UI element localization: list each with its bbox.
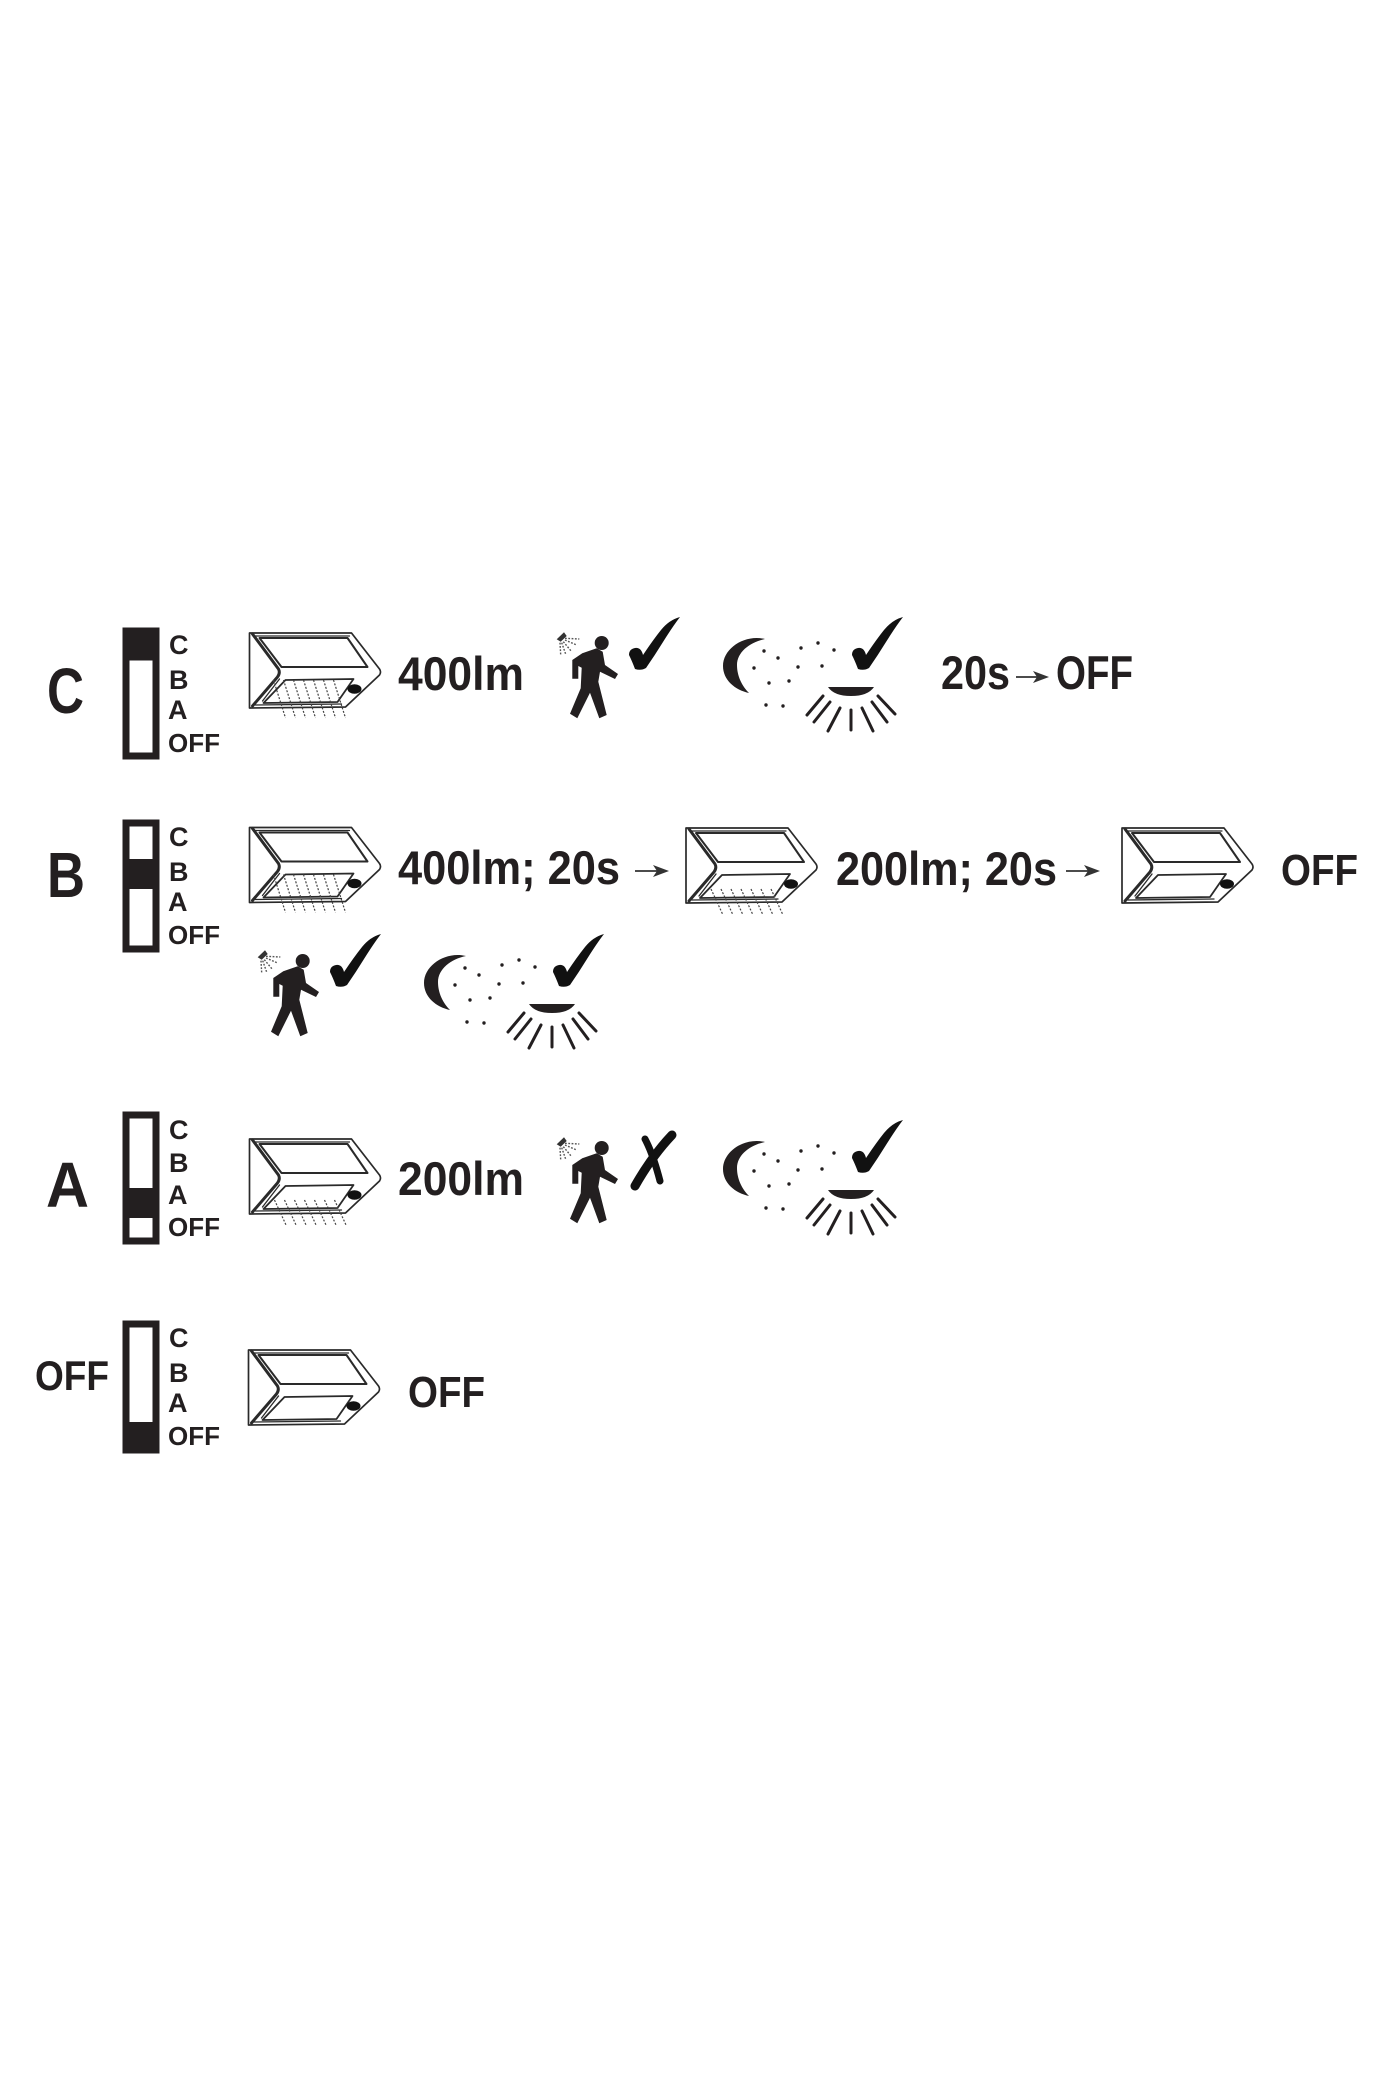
icon: lamp at 200lm — [250, 1139, 380, 1226]
text: 200lm: 200lm — [398, 1152, 524, 1205]
text: OFF: OFF — [408, 1368, 485, 1417]
switch: position B: C — [169, 822, 188, 852]
switch: position OFF: B — [169, 1358, 188, 1388]
panel: mode A — [46, 1115, 903, 1242]
switch: position OFF: C — [169, 1323, 188, 1353]
switch: position B: OFF — [168, 920, 220, 950]
switch: position A: A — [168, 1180, 188, 1210]
text: 400lm; 20s: 400lm; 20s — [398, 841, 620, 894]
panel: mode B — [47, 822, 1358, 1048]
switch: position A: C — [169, 1115, 188, 1145]
arrow — [1066, 865, 1100, 877]
icon: motion sensor person with cross — [557, 1135, 672, 1223]
switch: position C: A — [168, 695, 188, 725]
heading: A: A — [46, 1149, 89, 1221]
text: 20s to OFF: OFF — [1056, 646, 1133, 699]
switch: position C: B — [169, 665, 188, 695]
icon: lamp off — [1122, 828, 1253, 903]
switch: position A — [122, 1115, 220, 1242]
icon: lamp at 400lm — [250, 828, 380, 912]
icon: motion sensor person with check — [557, 617, 680, 718]
icon: night sensor with check — [723, 617, 903, 731]
icon: lamp with full light — [250, 633, 380, 718]
text: 400lm: 400lm — [398, 647, 524, 700]
icon: lamp at 200lm — [686, 828, 817, 915]
switch: position B: A — [168, 887, 188, 917]
text: 200lm; 20s: 200lm; 20s — [836, 842, 1057, 895]
switch: position OFF — [122, 1323, 220, 1453]
icon: night sensor with check — [424, 934, 604, 1048]
text: OFF: OFF — [1281, 846, 1358, 895]
panel: mode C — [47, 617, 1133, 758]
switch: position OFF: OFF — [168, 1421, 220, 1451]
switch: position C: OFF — [168, 728, 220, 758]
panel: mode OFF — [35, 1323, 485, 1453]
text: 20s to OFF: 20s — [941, 646, 1010, 699]
switch: position A: OFF — [168, 1212, 220, 1242]
switch: position C: C — [169, 630, 188, 660]
switch: position B — [122, 822, 220, 950]
heading: OFF: OFF — [35, 1352, 109, 1399]
text: 20s to OFF — [941, 646, 1133, 699]
arrow — [635, 865, 669, 877]
icon: lamp off — [248, 1350, 380, 1425]
switch: position A: B — [169, 1148, 188, 1178]
heading: C: C — [47, 655, 84, 727]
switch: position OFF: A — [168, 1388, 188, 1418]
switch: position B: B — [169, 857, 188, 887]
icon: night sensor with check — [723, 1120, 903, 1234]
heading: B: B — [47, 839, 85, 911]
icon: motion sensor person with check — [258, 934, 381, 1036]
switch: position C — [122, 628, 220, 758]
